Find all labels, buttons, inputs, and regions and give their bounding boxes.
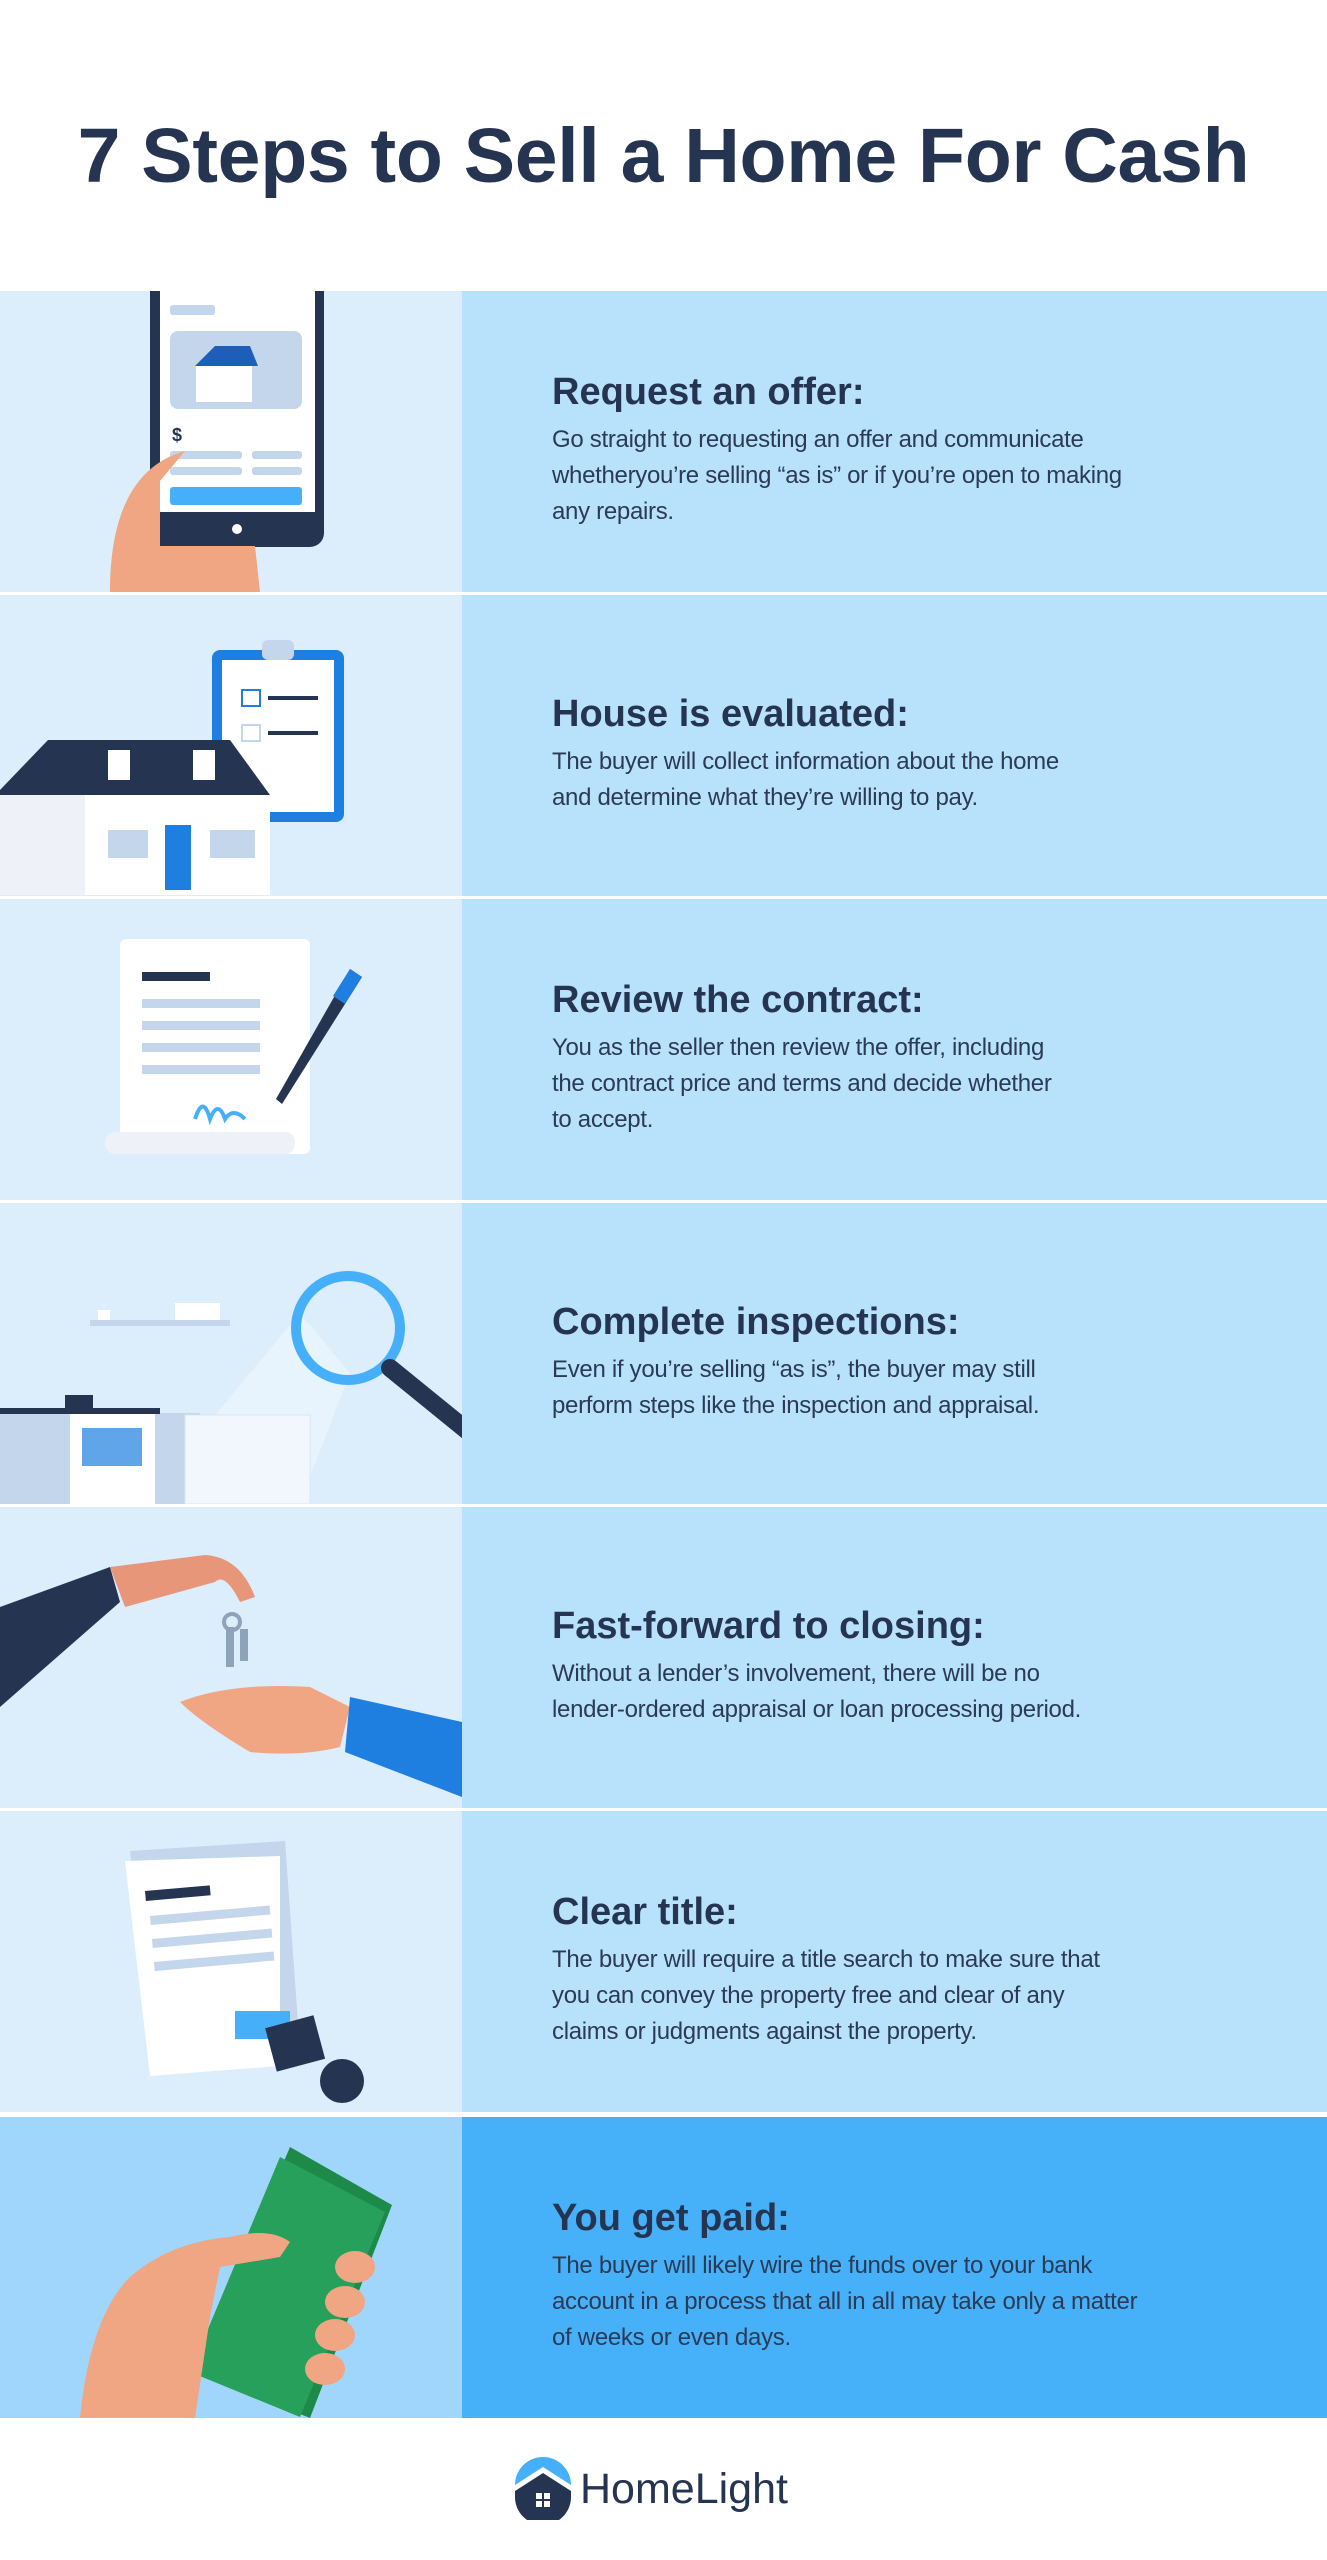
text: step 2: House is evaluated: xyxy=(552,693,909,735)
text: step 4: Even if you’re selling “as is”, the buyer may still xyxy=(552,1356,1036,1383)
icon: tablet in hand xyxy=(0,291,462,592)
text: step 3: You as the seller then review the offer, including xyxy=(552,1034,1044,1061)
text: step 2: and determine what they’re willing to pay. xyxy=(552,784,978,811)
text: step 5: lender-ordered appraisal or loan processing period. xyxy=(552,1696,1081,1723)
icon: tablet in hand: $ xyxy=(172,425,182,445)
logo: HomeLight xyxy=(515,2457,788,2520)
panel: step 3 review contract xyxy=(0,899,1327,1200)
text: step 4: Complete inspections: xyxy=(552,1301,960,1343)
text: step 6: you can convey the property free and clear of any xyxy=(552,1982,1064,2009)
text: step 1: Go straight to requesting an offer and communicate xyxy=(552,426,1084,453)
title: 7 Steps to Sell a Home For Cash xyxy=(78,113,1249,199)
logo: HomeLight: HomeLight xyxy=(580,2465,788,2513)
text: step 4: perform steps like the inspection and appraisal. xyxy=(552,1392,1039,1419)
text: step 7: of weeks or even days. xyxy=(552,2324,791,2351)
text: step 2: The buyer will collect information about the home xyxy=(552,748,1059,775)
text: step 1: any repairs. xyxy=(552,498,674,525)
icon: hand holding cash xyxy=(0,2117,462,2418)
icon: document and stamp xyxy=(0,1811,462,2112)
panel: step 2 house evaluated xyxy=(0,595,1327,896)
text: step 6 xyxy=(552,1891,1100,2045)
text: step 4 xyxy=(552,1301,1039,1419)
text: step 1 xyxy=(552,371,1122,525)
text: step 1: whetheryou’re selling “as is” or if you’re open to making xyxy=(552,462,1122,489)
icon: kitchen and magnifier xyxy=(0,1203,462,1504)
panel: step 4 inspections xyxy=(0,1203,1327,1504)
panel: step 7 you get paid xyxy=(0,2117,1327,2418)
text: step 7: You get paid: xyxy=(552,2197,790,2239)
text: step 6: Clear title: xyxy=(552,1891,738,1933)
icon: hands with keys xyxy=(0,1507,462,1808)
text: step 7 xyxy=(552,2197,1138,2351)
panel: step 1 request offer xyxy=(0,291,1327,592)
text: step 3 xyxy=(552,979,1052,1133)
icon: house and clipboard xyxy=(0,595,462,896)
text: step 5 xyxy=(552,1605,1081,1723)
text: step 6: The buyer will require a title search to make sure that xyxy=(552,1946,1100,1973)
text: step 6: claims or judgments against the property. xyxy=(552,2018,977,2045)
panel: step 5 closing xyxy=(0,1507,1327,1808)
text: step 5: Without a lender’s involvement, there will be no xyxy=(552,1660,1040,1687)
text: step 3: Review the contract: xyxy=(552,979,924,1021)
icon: contract and pen xyxy=(0,899,462,1200)
text: step 2 xyxy=(552,693,1059,811)
panel: step 6 clear title xyxy=(0,1811,1327,2112)
text: step 7: The buyer will likely wire the funds over to your bank xyxy=(552,2252,1092,2279)
text: step 5: Fast-forward to closing: xyxy=(552,1605,985,1647)
text: step 1: Request an offer: xyxy=(552,371,864,413)
text: step 3: the contract price and terms and decide whether xyxy=(552,1070,1052,1097)
text: step 3: to accept. xyxy=(552,1106,653,1133)
text: step 7: account in a process that all in all may take only a matter xyxy=(552,2288,1137,2315)
